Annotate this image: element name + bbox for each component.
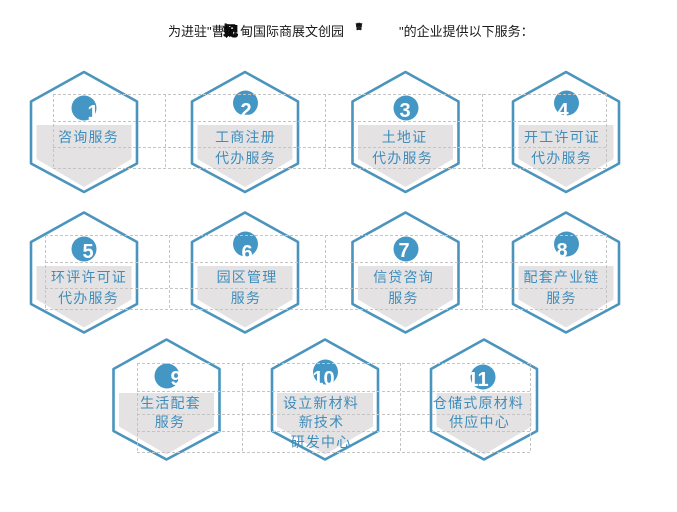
hexagon card 6: 园区管理服务: 园区管理 [217,269,277,285]
hexagon card 10: 设立新材料新技术研发中心: 设立新材料 [283,395,359,411]
hexagon card 4: 开工许可证代办服务: 开工许可证 [524,129,600,145]
hexagon card 5: 环评许可证代办服务: 环评许可证 [51,269,127,285]
hexagon card 1: 咨询服务: 1 [87,102,99,124]
hexagon card 11: 仓储式原材料供应中心 [431,340,537,460]
hexagon card 5: 环评许可证代办服务: 代办服务 [58,290,119,306]
hexagon card 7: 信贷咨询服务: 服务 [388,290,419,306]
hexagon card 3: 土地证代办服务: 土地证 [382,129,427,145]
hexagon card 2: 工商注册代办服务 [192,72,298,192]
hexagon card 7: 信贷咨询服务: 信贷咨询 [373,269,434,285]
hexagon card 10: 设立新材料新技术研发中心 [272,340,378,460]
title: 曹 [356,22,362,31]
hexagon card 9: 生活配套服务: 服务 [155,414,185,430]
hexagon card 4: 开工许可证代办服务: 代办服务 [531,150,592,166]
hexagon card 9: 生活配套服务 [114,340,220,460]
hexagon card 1: 咨询服务: 咨询服务 [58,129,119,145]
hexagon card 7: 信贷咨询服务: 7 [398,240,410,262]
hexagon card 4: 开工许可证代办服务: 4 [557,100,569,122]
title: 妃 [223,23,236,38]
title: 为进驻"曹 [168,24,225,39]
hexagon card 4: 开工许可证代办服务 [513,72,619,192]
hexagon card 11: 仓储式原材料供应中心: 11 [467,369,489,391]
hexagon card 6: 园区管理服务: 6 [241,242,253,264]
hexagon card 2: 工商注册代办服务: 2 [240,100,252,122]
hexagon card 8: 配套产业链服务 [513,212,619,332]
hexagon card 10: 设立新材料新技术研发中心: 10 [312,368,335,390]
hexagon card 8: 配套产业链服务: 8 [556,240,568,262]
hexagon card 11: 仓储式原材料供应中心: 仓储式原材料 [433,395,524,411]
title [168,22,534,39]
hexagon card 9: 生活配套服务: 生活配套 [140,395,201,411]
hexagon card 9: 生活配套服务: 9 [170,368,182,390]
hexagon card 5: 环评许可证代办服务: 5 [82,241,94,263]
hexagon card 10: 设立新材料新技术研发中心: 研发中心 [291,434,351,450]
hexagon card 2: 工商注册代办服务: 工商注册 [215,129,276,145]
title: 妃 [225,24,238,39]
hexagon card 3: 土地证代办服务 [352,72,458,192]
hexagon card 3: 土地证代办服务: 代办服务 [372,150,433,166]
hexagon card 8: 配套产业链服务: 服务 [546,290,577,306]
hexagon card 2: 工商注册代办服务: 代办服务 [215,150,276,166]
hexagon card 3: 土地证代办服务: 3 [399,100,411,122]
title: "的企业提供以下服务： [399,24,534,39]
hexagon card 10: 设立新材料新技术研发中心: 新技术 [299,414,344,430]
hexagon card 7: 信贷咨询服务 [352,212,458,332]
hexagon card 8: 配套产业链服务: 配套产业链 [524,269,600,285]
hexagon card 11: 仓储式原材料供应中心: 供应中心 [449,414,510,430]
hexagon card 1: 咨询服务 [31,72,137,192]
hexagon card 5: 环评许可证代办服务 [31,212,137,332]
hexagon card 6: 园区管理服务: 服务 [231,290,261,306]
hexagon card 6: 园区管理服务 [192,212,298,332]
title: 甸国际商展文创园 [240,24,344,39]
